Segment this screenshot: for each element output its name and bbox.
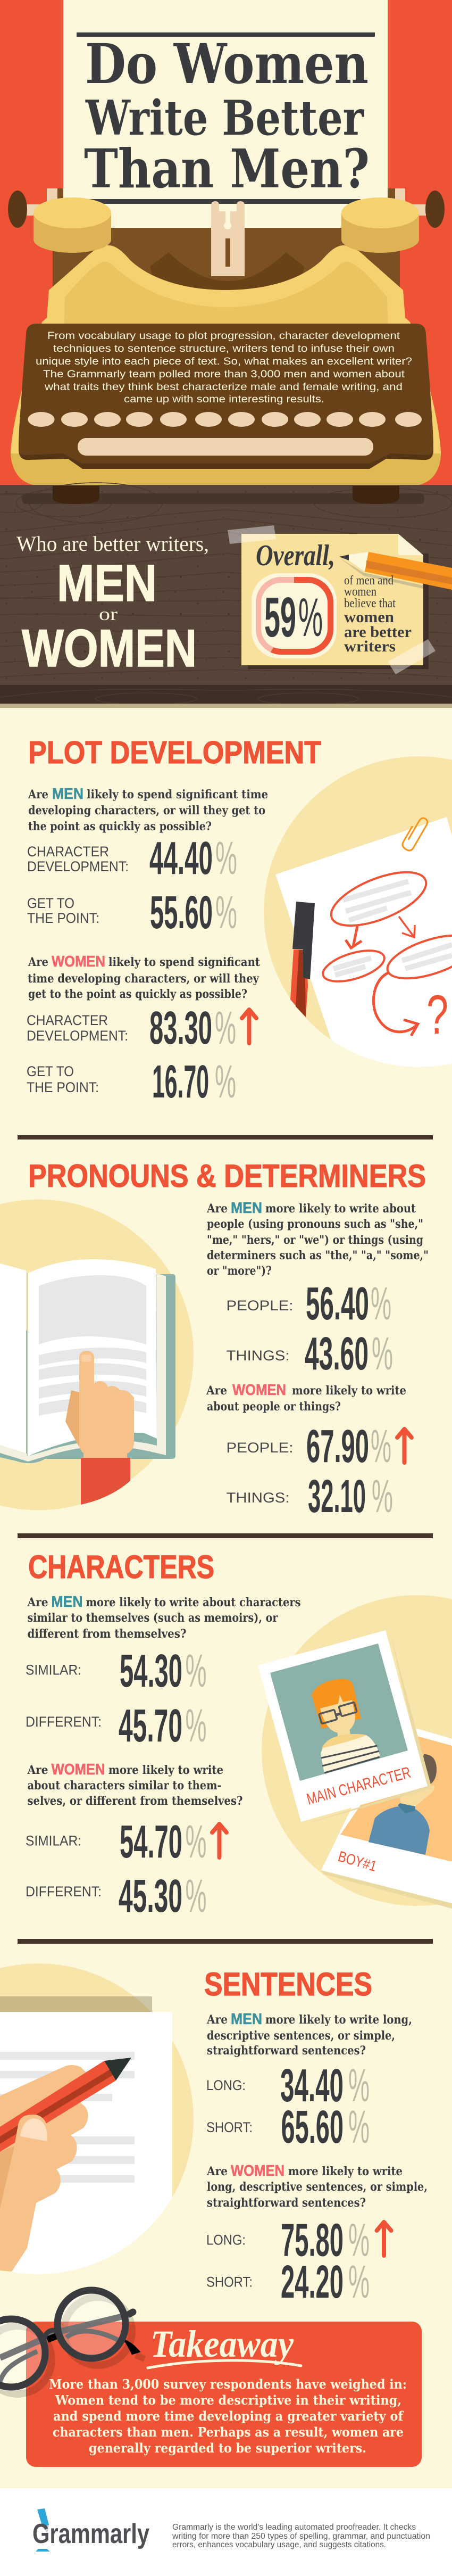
stat: women get to the point 16.70%: THE POINT:: [27, 1079, 99, 1095]
stat: women character development 83.30%: DEVELOPMENT:: [27, 1028, 128, 1044]
panel: typewriter hero: [0, 0, 452, 486]
panel: paper sheet: [63, 0, 388, 228]
question: men: [206, 1200, 429, 1278]
arrow: up: [376, 2222, 391, 2256]
stat: men character development 44.40%: %: [215, 832, 237, 884]
panel: keyboard: [19, 324, 433, 469]
stat: men short 65.60%: %: [348, 2101, 370, 2153]
text: overall finding: [344, 574, 412, 655]
stat: women character development 83.30%: CHARACTER: [27, 1012, 108, 1028]
text: introduction: came up with some interesting results.: [124, 394, 324, 405]
stat: women short 24.20%: SHORT:: [206, 2274, 253, 2290]
panel: characters illustration: [258, 1595, 452, 1909]
stat: women short 24.20%: %: [348, 2256, 370, 2308]
question: men: Are: [28, 788, 48, 802]
icon: boy polaroid: BOY#1: [336, 1848, 379, 1875]
icon: paperclip: [401, 815, 429, 852]
stat: men short 65.60%: SHORT:: [206, 2119, 253, 2135]
question: women: Are: [206, 1384, 227, 1398]
icon: writing hand: [0, 2058, 131, 2272]
icon: boy polaroid: [321, 1722, 452, 1909]
question: women: more likely to write: [292, 1384, 406, 1398]
text: takeaway summary: More than 3,000 survey respondents have weighed in:: [49, 2376, 407, 2392]
question: women: WOMEN: [231, 2162, 284, 2179]
stat: women get to the point 16.70%: [27, 1056, 236, 1108]
text: takeaway summary: characters than men. Perhaps as a result, women are: [53, 2424, 404, 2440]
icon: right roller knob: [341, 197, 419, 253]
text: introduction: techniques to sentence structure, writers tend to infuse their own: [53, 343, 395, 354]
text: overall finding: are better: [344, 623, 412, 641]
stat: men long 34.40%: 34.40: [280, 2060, 344, 2111]
shadow under typewriter: [22, 493, 424, 504]
text: about grammarly: Grammarly is the world's leading automated proofreader. It checks: [172, 2523, 416, 2532]
text: introduction: From vocabulary usage to plot progression, character development: [47, 331, 400, 342]
question: men: MEN: [52, 786, 83, 803]
stat: women long 75.80%: LONG:: [206, 2232, 246, 2248]
panel: wooden desk: [0, 483, 452, 708]
stat: men character development 44.40%: CHARACTER: [27, 844, 109, 860]
stat: women people 67.90%: %: [371, 1421, 391, 1472]
text: about grammarly: errors, enhances vocabulary usage, and suggests citations.: [172, 2540, 386, 2549]
stat: women similar 54.70%: SIMILAR:: [26, 1833, 81, 1849]
stat: women character development 83.30%: 83.30: [149, 1002, 212, 1054]
icon: typewriter feet: [53, 486, 399, 504]
question: women: Are: [27, 1763, 48, 1777]
question: men: different from themselves?: [28, 1627, 186, 1641]
stat: men get to the point 55.60%: GET TO: [27, 895, 74, 911]
heading: takeaway: Takeaway: [150, 2323, 294, 2365]
question: men: straightforward sentences?: [207, 2044, 366, 2058]
stat: men similar 54.30%: SIMILAR:: [26, 1662, 81, 1678]
stat: men things 43.60%: %: [372, 1328, 393, 1380]
question: men: more likely to write about characters: [86, 1596, 301, 1609]
question: women: selves, or different from themselves?: [28, 1794, 242, 1808]
panel: overall sticky note: [228, 525, 452, 674]
question: men: people (using pronouns such as "she,": [207, 1217, 423, 1231]
arrow: up: [397, 1429, 412, 1463]
text: overall: Overall,: [256, 539, 335, 572]
stat: men long 34.40%: %: [348, 2060, 370, 2111]
stat: men similar 54.30%: 54.30: [120, 1645, 182, 1697]
title: Do Women: [85, 32, 369, 96]
arrow: up: [212, 1824, 227, 1857]
title: [77, 32, 375, 204]
stat: women get to the point 16.70%: 16.70: [152, 1056, 209, 1108]
text: overall finding: women: [344, 608, 394, 626]
panel: plot development illustration: [264, 756, 452, 1067]
stat: men people 56.40%: PEOPLE:: [227, 1298, 294, 1314]
text: overall finding: writers: [344, 638, 396, 655]
stat: women get to the point 16.70%: GET TO: [27, 1063, 74, 1079]
question: men: [28, 786, 268, 833]
paper with mind map: [275, 817, 452, 1067]
question: men: MEN: [51, 1594, 83, 1611]
heading: characters: CHARACTERS: [28, 1549, 214, 1585]
panel: sentences illustration: [0, 1963, 194, 2289]
question: men: likely to spend significant time: [87, 788, 268, 802]
stat: men people 56.40%: [227, 1278, 391, 1330]
clipboard clip: [0, 1996, 152, 2012]
stat: women different 45.30%: DIFFERENT:: [26, 1884, 102, 1900]
heading: who are better writers: Who are better writers,: [16, 532, 209, 556]
stat: men short 65.60%: 65.60: [281, 2101, 344, 2153]
heading: who are better writers: WOMEN: [22, 618, 197, 678]
icon: left roller knob: [34, 197, 111, 253]
icon: typewriter rollers and knobs: [8, 188, 445, 228]
icon: main character polaroid: MAIN CHARACTER: [305, 1764, 413, 1809]
section: characters: [26, 1549, 301, 1922]
question: women: time developing characters, or will they: [28, 972, 260, 986]
question: men: developing characters, or will they get to: [28, 804, 265, 818]
stat: women similar 54.70%: %: [185, 1816, 206, 1868]
stat: women character development 83.30%: [27, 1002, 236, 1054]
chart: hand-drawn mind map: [322, 871, 452, 1037]
question: women: WOMEN: [51, 1761, 105, 1778]
text: introduction: [36, 331, 412, 405]
stat: men character development 44.40%: 44.40: [149, 832, 213, 884]
question: men: Are: [206, 2013, 228, 2027]
logo: grammarly: Grammarly: [32, 2519, 149, 2549]
woman portrait: [312, 1679, 380, 1773]
stat: women similar 54.70%: 54.70: [120, 1816, 182, 1868]
stat: women short 24.20%: 24.20: [281, 2256, 344, 2308]
stat: men different 45.70%: DIFFERENT:: [26, 1714, 102, 1730]
text lines on paper: [0, 2052, 135, 2183]
question: women: about people or things?: [207, 1400, 341, 1414]
arrow: up: [242, 1010, 256, 1043]
heading: who are better writers: [16, 532, 209, 678]
panel: takeaway: [0, 2290, 422, 2467]
stat: women get to the point 16.70%: %: [215, 1056, 236, 1108]
icon: main character polaroid: [258, 1630, 432, 1824]
question: men: Are: [206, 1202, 228, 1216]
question: women: more likely to write: [288, 2165, 403, 2178]
stat: women things 32.10%: 32.10: [308, 1471, 366, 1522]
stat: men different 45.70%: [26, 1700, 206, 1752]
stat: men long 34.40%: [206, 2060, 370, 2111]
question: women: [27, 1761, 242, 1808]
question: women: [206, 2162, 428, 2210]
icon: typewriter body back: [53, 201, 400, 292]
question: women: about characters similar to them-: [28, 1779, 221, 1793]
text: introduction: what traits they think best characterize male and female writing, and: [44, 382, 403, 393]
heading: who are better writers: MEN: [57, 554, 157, 612]
stat: women things 32.10%: %: [372, 1471, 393, 1522]
chart: 59 percent ring: 59: [264, 586, 296, 649]
section: plot development: [27, 735, 321, 1108]
question: women: Are: [28, 955, 48, 969]
pencil in hand: [0, 2058, 131, 2152]
question: men: the point as quickly as possible?: [28, 820, 212, 833]
stat: men similar 54.30%: [26, 1645, 206, 1697]
tape bottom: [388, 639, 436, 674]
question: men: [206, 2011, 412, 2058]
panel: pronouns illustration: [0, 1200, 194, 1510]
stat: women people 67.90%: 67.90: [306, 1421, 369, 1472]
question: women: [28, 953, 261, 1001]
text: about grammarly: [172, 2523, 430, 2549]
text: overall finding: of men and: [344, 574, 394, 588]
title: Than Men?: [84, 137, 370, 200]
stat: men character development 44.40%: DEVELOPMENT:: [27, 858, 129, 874]
icon: typewriter keys: [28, 412, 422, 427]
icon: open book: [0, 1259, 175, 1463]
stat: men get to the point 55.60%: THE POINT:: [27, 910, 99, 926]
stat: men short 65.60%: [206, 2101, 370, 2153]
question: men: descriptive sentences, or simple,: [207, 2029, 395, 2043]
text: introduction: The Grammarly team polled more than 3,000 men and women about: [43, 369, 405, 380]
question: men: more likely to write about: [265, 1202, 416, 1216]
question: women: get to the point as quickly as possible?: [28, 987, 247, 1001]
stat: women people 67.90%: PEOPLE:: [227, 1440, 294, 1456]
stat: women different 45.30%: 45.30: [119, 1870, 182, 1922]
question: women: Are: [206, 2165, 228, 2178]
heading: sentences: SENTENCES: [204, 1966, 372, 2002]
stat: men things 43.60%: THINGS:: [227, 1348, 289, 1364]
question: men: MEN: [231, 1200, 262, 1217]
stat: women short 24.20%: [206, 2256, 370, 2308]
text: takeaway summary: and spend more time developing a greater variety of: [53, 2408, 404, 2424]
panel: footer: [0, 2488, 452, 2576]
icon: typewriter yellow body: [11, 245, 441, 486]
stat: men different 45.70%: %: [185, 1700, 206, 1752]
question: men: [27, 1594, 300, 1641]
icon: pencil: [339, 552, 452, 590]
question: men: or "more")?: [207, 1264, 272, 1278]
stat: women people 67.90%: [227, 1421, 391, 1472]
question: women: long, descriptive sentences, or simple,: [207, 2180, 428, 2194]
question: men: more likely to write long,: [265, 2013, 412, 2027]
stat: women long 75.80%: 75.80: [281, 2214, 344, 2266]
question: men: Are: [27, 1596, 48, 1609]
stat: men get to the point 55.60%: [27, 887, 237, 938]
icon: glasses: [0, 2290, 145, 2394]
stat: women long 75.80%: %: [348, 2214, 370, 2266]
tape top: [228, 525, 276, 544]
heading: who are better writers: or: [99, 605, 118, 624]
chart: 59 percent ring: %: [298, 587, 323, 648]
stat: men people 56.40%: %: [371, 1278, 391, 1330]
question: women: more likely to write: [108, 1763, 223, 1777]
text: introduction: unique style into each piece of text. So, what makes an excellent writer?: [36, 356, 412, 367]
section: pronouns and determiners: [28, 1158, 429, 1522]
icon: pen: [290, 902, 315, 1017]
question: women: straightforward sentences?: [207, 2196, 366, 2210]
stat: men different 45.70%: 45.70: [119, 1700, 182, 1752]
stat: women character development 83.30%: %: [215, 1002, 236, 1054]
text: takeaway summary: generally regarded to be superior writers.: [89, 2440, 366, 2456]
title: Write Better: [85, 90, 364, 146]
question: women: WOMEN: [52, 953, 105, 970]
stat: women different 45.30%: %: [185, 1870, 206, 1922]
stat: men things 43.60%: 43.60: [305, 1328, 369, 1380]
stat: women things 32.10%: [227, 1471, 393, 1522]
text: takeaway summary: [49, 2376, 407, 2456]
stat: men people 56.40%: 56.40: [306, 1278, 369, 1330]
stat: men long 34.40%: LONG:: [206, 2077, 246, 2093]
text: overall finding: believe that: [344, 597, 396, 610]
heading: plot development: PLOT DEVELOPMENT: [28, 735, 321, 770]
stat: women similar 54.70%: [26, 1816, 206, 1868]
question: women: [206, 1382, 406, 1414]
stat: women different 45.30%: [26, 1870, 206, 1922]
question: women: likely to spend significant: [108, 955, 261, 969]
stat: men get to the point 55.60%: 55.60: [150, 887, 213, 938]
stat: men get to the point 55.60%: %: [215, 887, 237, 938]
icon: space bar: [78, 438, 373, 456]
question: men: "me," "hers," or "we") or things (using: [207, 1233, 423, 1247]
logo: grammarly: [32, 2508, 149, 2552]
paper sheet: [0, 2012, 172, 2198]
chart: 59 percent ring: [252, 573, 337, 658]
text: about grammarly: writing for more than 250 types of spelling, grammar, and punctuation: [172, 2532, 430, 2541]
section: sentences: [204, 1966, 428, 2308]
text: takeaway summary: Women tend to be more descriptive in their writing,: [55, 2392, 401, 2408]
question: women: WOMEN: [232, 1382, 286, 1399]
stat: men things 43.60%: [227, 1328, 393, 1380]
stat: women long 75.80%: [206, 2214, 370, 2266]
question: men: similar to themselves (such as memoirs), or: [28, 1611, 278, 1625]
question: men: MEN: [231, 2011, 262, 2028]
stat: women things 32.10%: THINGS:: [227, 1490, 289, 1506]
stat: men similar 54.30%: %: [185, 1645, 206, 1697]
icon: pointing hand: [65, 1351, 134, 1505]
stat: men character development 44.40%: [27, 832, 237, 884]
text: overall finding: women: [344, 585, 376, 599]
